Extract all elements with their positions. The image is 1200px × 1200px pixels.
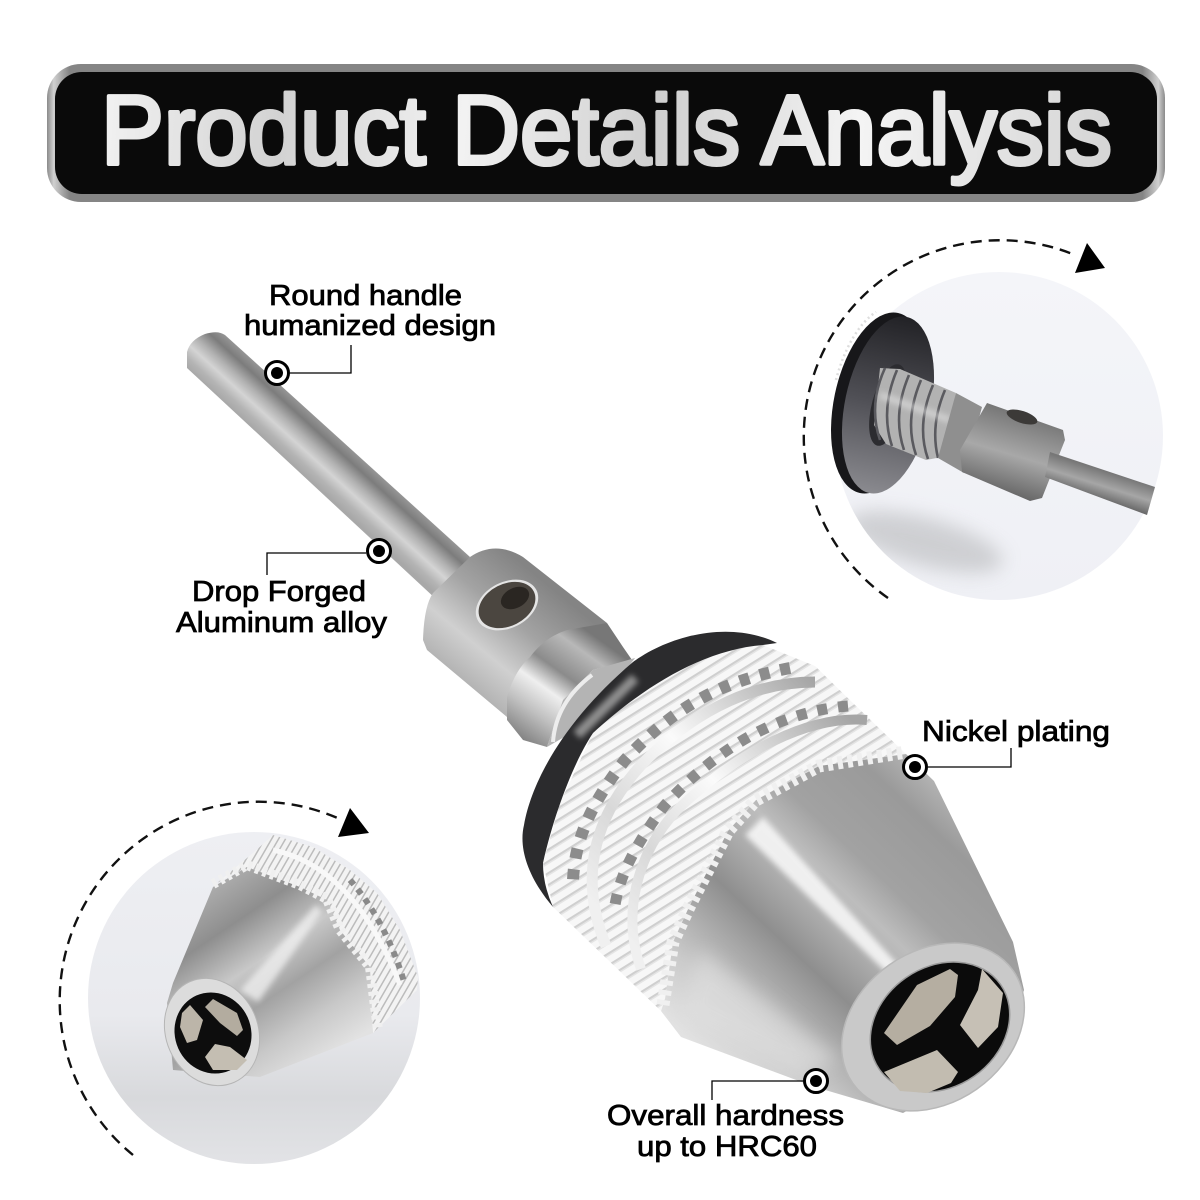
callout: aluminum alloy: Drop Forged	[192, 576, 366, 608]
panel: rear detail circle	[816, 272, 1163, 600]
nose highlights	[680, 817, 902, 1075]
callout: hardness: up to HRC60	[637, 1131, 817, 1163]
callout: round handle	[244, 280, 496, 384]
bright grip rings	[592, 682, 867, 969]
jaw	[884, 969, 958, 1045]
arrow: rear circle rotation	[804, 240, 1105, 598]
main product: pin vise chuck	[187, 332, 1057, 1145]
detail: shadow on backdrop	[853, 504, 1006, 580]
black ring	[522, 632, 777, 907]
detail: cone highlight	[240, 905, 322, 1002]
callout: round handle: Round handle	[269, 280, 462, 312]
knurled grip	[543, 645, 906, 1011]
callout: aluminum alloy: Aluminum alloy	[176, 607, 388, 639]
detail: shaft	[1045, 452, 1155, 515]
nose serrated edge	[663, 752, 906, 1005]
tapered nose	[661, 754, 1024, 1113]
detail: knurled ring	[217, 835, 418, 1033]
arrow: front circle rotation	[60, 802, 369, 1155]
detail: neck	[938, 393, 982, 473]
callout: aluminum alloy	[176, 540, 390, 639]
callout: round handle: humanized design	[244, 310, 496, 342]
shaft	[187, 332, 470, 600]
detail: cone serrated edge	[213, 865, 378, 1030]
panel: front detail circle	[88, 832, 420, 1164]
callout: nickel plating: Nickel plating	[922, 716, 1110, 748]
collar hole	[467, 570, 547, 640]
title banner	[47, 64, 1165, 202]
chuck face	[809, 909, 1057, 1145]
detail: collar with hole	[960, 403, 1065, 501]
detail: black disc	[816, 304, 949, 502]
collar	[423, 548, 607, 717]
callout: hardness: Overall hardness	[607, 1100, 844, 1132]
title: Product Details Analysis	[101, 75, 1112, 185]
detail: cone face	[148, 963, 276, 1101]
neck groove	[547, 658, 635, 747]
jaw	[960, 969, 1003, 1048]
detail: cone body	[167, 867, 373, 1077]
neck	[507, 623, 632, 747]
detail: threaded post	[862, 360, 956, 460]
callout: hardness	[607, 1070, 844, 1163]
jaw	[884, 1050, 958, 1093]
callout: nickel plating	[904, 716, 1110, 778]
